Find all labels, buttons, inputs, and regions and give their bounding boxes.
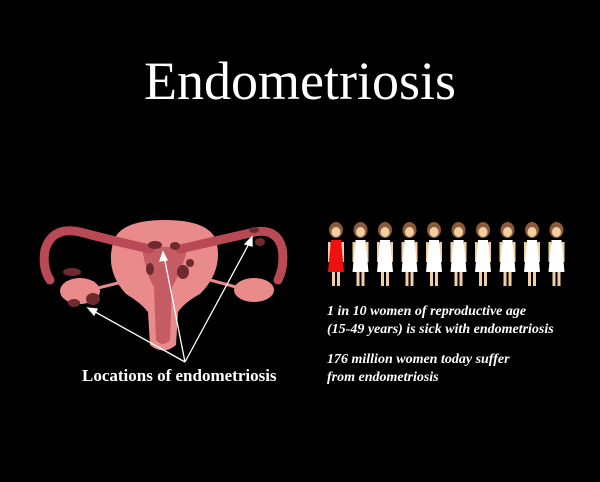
caption: locations: Locations of endometriosis xyxy=(82,366,277,385)
title: Endometriosis xyxy=(144,51,456,111)
stat text 2: from endometriosis xyxy=(327,370,439,385)
red figure xyxy=(328,222,344,286)
stat text 2: 176 million women today suffer xyxy=(327,352,510,367)
arrows xyxy=(88,237,252,362)
ovaries xyxy=(60,278,274,304)
lesions xyxy=(63,227,265,307)
women pictogram row xyxy=(328,222,564,286)
stat text 1 xyxy=(327,304,554,337)
uterus body xyxy=(111,220,218,350)
stat text 1: 1 in 10 women of reproductive age xyxy=(327,304,526,319)
stat text 2 xyxy=(327,352,510,385)
stat text 1: (15-49 years) is sick with endometriosis xyxy=(327,322,554,337)
white figures xyxy=(352,222,564,286)
fallopian tubes xyxy=(44,231,283,280)
